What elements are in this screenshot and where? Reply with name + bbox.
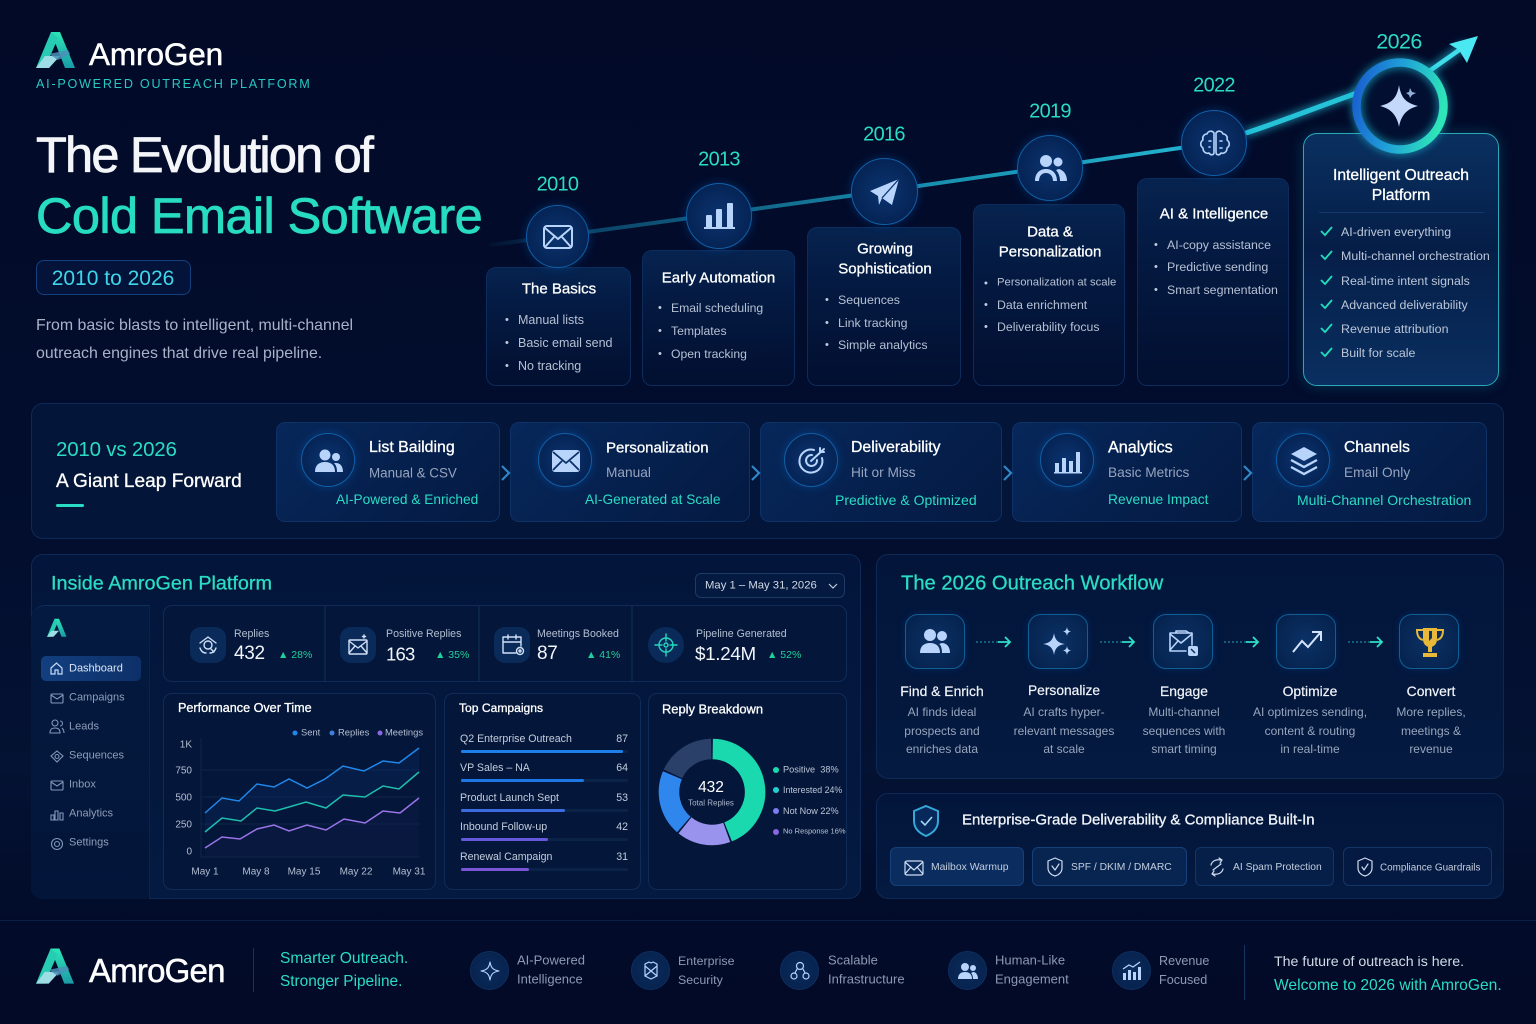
step: Personalize: AI crafts hyper- — [1023, 705, 1105, 719]
intro text: From basic blasts to intelligent, multi-channel — [36, 317, 353, 334]
card: Early Automation: Early Automation — [662, 269, 775, 286]
step: Convert: meetings & — [1401, 724, 1461, 738]
card: The Basics: No tracking — [518, 359, 581, 373]
timeline growth line with arrow — [494, 36, 1478, 246]
KPI bar: ▲ 35% — [435, 649, 469, 661]
card: Intelligent Outreach Platform: Built for scale — [1341, 346, 1415, 360]
node: 2022 brain — [1181, 110, 1247, 176]
step: Convert: Convert — [1407, 683, 1455, 699]
card: Growing Sophistication: Growing — [857, 240, 913, 257]
panel: The 2026 Outreach Workflow — [876, 554, 1504, 779]
campaign: Renewal Campaign — [460, 851, 628, 871]
chip: Mailbox Warmup: Mailbox Warmup — [931, 862, 1009, 873]
chart axis labels: 1K — [180, 739, 192, 750]
KPI bar: $1.24M — [695, 643, 756, 664]
title: Cold Email Software — [36, 187, 482, 244]
comparison card: deliverability — [760, 422, 1002, 522]
area: meetings — [205, 798, 419, 857]
node: 2010 envelope — [526, 205, 589, 268]
year 2019: 2019 — [1029, 100, 1071, 122]
chart axis labels: 750 — [175, 765, 192, 776]
node: 2013 bars — [686, 183, 752, 249]
step: Optimize — [1253, 612, 1367, 756]
comparison card: channels — [1252, 422, 1487, 522]
campaign: Q2 Enterprise Outreach — [460, 733, 628, 753]
donut legend: Not Now 22% — [783, 806, 839, 816]
KPI: replies — [190, 627, 226, 663]
comparison card: channels: Channels — [1344, 439, 1410, 456]
footer feature: Scalable Infrastructure — [780, 951, 905, 990]
footer divider — [0, 920, 1536, 921]
campaign: Q2 Enterprise Outreach: Q2 Enterprise Outreach — [460, 733, 572, 745]
campaign: Inbound Follow-up: 42 — [616, 821, 628, 833]
date range selector — [695, 573, 845, 598]
card: Data & Personalization: Deliverability focus — [997, 320, 1100, 334]
comparison card: analytics — [1012, 422, 1242, 522]
legend dots — [292, 730, 382, 736]
footer closing message — [1244, 945, 1506, 1000]
campaign: Product Launch Sept — [460, 792, 628, 812]
node: 2019 people — [1017, 135, 1083, 201]
footer feature: Revenue Focused: Revenue — [1159, 954, 1209, 968]
footer feature: Scalable Infrastructure: Scalable — [828, 953, 878, 968]
card: The Basics — [486, 267, 631, 386]
footer feature: Human-Like Engagement: Engagement — [995, 972, 1069, 987]
footer logo — [36, 948, 225, 989]
card: Intelligent Outreach Platform: AI-driven everything — [1341, 225, 1451, 239]
step: Find & Enrich: enriches data — [906, 742, 978, 756]
chart card: Performance Over Time — [163, 693, 436, 890]
step: Personalize: at scale — [1043, 742, 1085, 756]
campaign: Inbound Follow-up: Inbound Follow-up — [460, 821, 547, 833]
KPI: pipeline generated — [648, 627, 684, 663]
campaign: Product Launch Sept: Product Launch Sept — [460, 792, 559, 804]
comparison card: analytics: Revenue Impact — [1108, 492, 1208, 507]
sidebar — [31, 605, 150, 899]
step: Convert: revenue — [1409, 742, 1453, 756]
donut legend: No Response 16% — [783, 827, 846, 836]
comparison card: list building: Manual & CSV — [369, 465, 457, 480]
chart legend labels: Sent — [301, 727, 320, 738]
comparison card: channels: Email Only — [1344, 465, 1410, 480]
chart axis labels: May 22 — [340, 866, 372, 877]
step: Optimize: AI optimizes sending, — [1253, 705, 1367, 719]
nav icons — [49, 694, 64, 850]
comparison card: analytics: Analytics — [1108, 439, 1173, 457]
donut legend: Positive 38% — [783, 765, 839, 775]
footer feature: Scalable Infrastructure: Infrastructure — [828, 972, 905, 987]
footer feature: AI-Powered Intelligence: AI-Powered — [517, 953, 585, 968]
comparison card: personalization: Personalization — [606, 439, 709, 456]
card: Data & Personalization: Personalization at scale — [997, 277, 1116, 289]
card: Intelligent Outreach Platform: Revenue attribution — [1341, 322, 1448, 336]
year 2016: 2016 — [863, 124, 905, 146]
comparison card: personalization: Manual — [606, 465, 651, 480]
sidebar: Inbox — [69, 779, 96, 791]
footer feature: Revenue Focused — [1112, 951, 1209, 990]
footer slogan — [253, 948, 423, 992]
card: Early Automation — [642, 250, 795, 386]
intro text: outreach engines that drive real pipeline. — [36, 345, 322, 362]
card: Early Automation: Open tracking — [671, 347, 747, 361]
card: AI & Intelligence: Predictive sending — [1167, 260, 1268, 274]
grid lines — [201, 738, 420, 857]
footer feature: Enterprise Security: Enterprise — [678, 954, 734, 968]
step: Engage: Engage — [1160, 683, 1208, 699]
donut chart — [658, 738, 766, 846]
sidebar: Leads — [69, 721, 99, 733]
comparison card: analytics: Basic Metrics — [1108, 465, 1189, 480]
workflow heading: The 2026 Outreach Workflow — [901, 572, 1163, 594]
KPI bar: 163 — [386, 643, 414, 664]
arrow — [976, 636, 1012, 648]
sidebar: Sequences — [69, 750, 124, 762]
footer slogan: Stronger Pipeline. — [280, 973, 402, 990]
icon: shield — [913, 804, 939, 837]
date pill — [36, 260, 191, 295]
KPI dividers — [324, 606, 632, 681]
logo: AmroGen header mark — [36, 32, 75, 68]
card: Intelligent Outreach Platform: Advanced deliverability — [1341, 298, 1468, 312]
title — [36, 126, 482, 244]
step: Convert — [1396, 612, 1466, 756]
step: Personalize — [1014, 612, 1114, 756]
step: Engage — [1143, 612, 1225, 756]
KPI bar: ▲ 28% — [278, 649, 312, 661]
donut center label — [688, 779, 734, 807]
node: 2016 paper plane — [851, 158, 918, 225]
comparison heading: A Giant Leap Forward — [56, 471, 242, 492]
series: sent — [205, 748, 419, 813]
card: AI & Intelligence: AI-copy assistance — [1167, 238, 1271, 252]
sidebar logo — [47, 618, 66, 637]
step: Engage: Multi-channel — [1148, 705, 1220, 719]
step: Find & Enrich: Find & Enrich — [900, 683, 984, 699]
footer closing message: The future of outreach is here. — [1274, 953, 1464, 969]
step: Personalize: Personalize — [1028, 683, 1100, 698]
card: Top Campaigns: Top Campaigns — [459, 701, 543, 715]
chart title: Performance Over Time — [178, 701, 312, 715]
card: Data & Personalization — [973, 204, 1125, 386]
footer feature: Revenue Focused: Focused — [1159, 973, 1207, 987]
comparison card: list building — [276, 422, 500, 522]
nav: dashboard active — [41, 656, 141, 681]
campaign: Renewal Campaign: Renewal Campaign — [460, 851, 552, 863]
card: Early Automation: Email scheduling — [671, 301, 763, 315]
tagline: AI-POWERED OUTREACH PLATFORM — [36, 77, 311, 91]
card: Growing Sophistication: Sequences — [838, 293, 900, 307]
chart axis labels: 500 — [175, 792, 192, 803]
footer feature: AI-Powered Intelligence — [470, 951, 585, 990]
campaign: VP Sales - NA — [460, 762, 628, 782]
card: Early Automation: Templates — [671, 324, 727, 338]
footer slogan: Smarter Outreach. — [280, 950, 408, 967]
chart axis labels: May 31 — [393, 866, 425, 877]
card: AI & Intelligence: Smart segmentation — [1167, 283, 1278, 297]
card: Intelligent Outreach Platform: Intelligent Outreach — [1333, 166, 1469, 183]
chart legend labels: Replies — [338, 727, 369, 738]
campaign: Q2 Enterprise Outreach: 87 — [616, 733, 628, 745]
area: sent — [205, 748, 419, 832]
chip: Compliance Guardrails — [1343, 847, 1492, 886]
card: Intelligent Outreach Platform — [1303, 133, 1499, 386]
campaign: VP Sales - NA: VP Sales – NA — [460, 762, 530, 774]
panel: 2010 vs 2026 comparison — [31, 403, 1504, 539]
KPI bar: 432 — [234, 643, 265, 664]
campaign: VP Sales - NA: 64 — [616, 762, 628, 774]
card: Data & Personalization: Data enrichment — [997, 298, 1087, 312]
card: Growing Sophistication: Sophistication — [838, 260, 932, 277]
chip: SPF / DKIM / DMARC — [1032, 847, 1187, 886]
card: The Basics: The Basics — [522, 280, 596, 297]
sidebar: Settings — [69, 837, 109, 849]
panel: Enterprise-Grade Deliverability — [876, 793, 1504, 899]
year 2010: 2010 — [537, 174, 578, 196]
comparison heading: 2010 vs 2026 — [56, 438, 177, 461]
KPI bar: Pipeline Generated — [696, 628, 787, 640]
chart axis labels: May 15 — [288, 866, 320, 877]
KPI: positive replies — [340, 627, 376, 663]
donut legend — [773, 765, 846, 836]
KPI bar — [163, 605, 847, 682]
donut center label: 432 — [698, 779, 724, 796]
intro text — [36, 317, 353, 362]
nav: dashboard active: Dashboard — [69, 663, 123, 675]
year 2013: 2013 — [698, 148, 740, 170]
card: Reply Breakdown — [648, 693, 847, 890]
chevron arrows between comparison cards — [501, 465, 1252, 481]
card: AI & Intelligence — [1137, 178, 1289, 386]
card: Intelligent Outreach Platform: Multi-channel orchestration — [1341, 249, 1490, 263]
chart legend labels — [301, 727, 423, 738]
donut center label: Total Replies — [688, 798, 734, 807]
step: Engage: smart timing — [1151, 742, 1217, 756]
nav labels: Campaigns — [69, 692, 125, 704]
arrow — [1100, 636, 1136, 648]
step: Find & Enrich: AI finds ideal — [908, 705, 976, 719]
chart axis labels: 250 — [175, 819, 192, 830]
KPI bar: ▲ 52% — [767, 649, 801, 661]
chip: Compliance Guardrails: Compliance Guardrails — [1380, 862, 1480, 873]
step: Personalize: relevant messages — [1014, 724, 1114, 738]
comparison card: list building: AI-Powered & Enriched — [336, 492, 478, 507]
year 2026: 2026 — [1376, 30, 1422, 54]
panel heading: Inside AmroGen Platform — [51, 573, 272, 595]
chart axis labels: May 1 — [191, 866, 219, 877]
arrow — [1224, 636, 1260, 648]
footer feature: Human-Like Engagement — [948, 951, 1069, 990]
step: Find & Enrich — [900, 612, 984, 756]
footer closing message: Welcome to 2026 with AmroGen. — [1274, 977, 1502, 994]
card: The Basics: Basic email send — [518, 336, 612, 350]
panel: Inside AmroGen Platform — [31, 554, 861, 899]
card: Data & Personalization: Personalization — [999, 243, 1101, 260]
sidebar: Analytics — [69, 808, 113, 820]
comparison card: list building: List Bailding — [369, 439, 455, 456]
card: Intelligent Outreach Platform: Platform — [1372, 186, 1430, 203]
step: Find & Enrich: prospects and — [904, 724, 980, 738]
step: Convert: More replies, — [1396, 705, 1466, 719]
step: Engage: sequences with — [1143, 724, 1225, 738]
arrow — [1348, 636, 1384, 648]
campaign: Product Launch Sept: 53 — [616, 792, 628, 804]
chart legend labels: Meetings — [385, 727, 423, 738]
footer feature: AI-Powered Intelligence: Intelligence — [517, 972, 583, 987]
step: Optimize: content & routing — [1265, 724, 1355, 738]
step: Optimize: in real-time — [1280, 742, 1340, 756]
footer feature: Enterprise Security: Security — [678, 973, 723, 987]
chart axis labels — [175, 739, 425, 877]
chip: AI Spam Protection: AI Spam Protection — [1233, 862, 1322, 873]
donut legend: Interested 24% — [783, 785, 842, 795]
card: Top Campaigns — [444, 693, 641, 890]
KPI bar: 87 — [537, 643, 558, 664]
campaign: Inbound Follow-up — [460, 821, 628, 841]
year 2022: 2022 — [1193, 74, 1235, 96]
comparison card: deliverability: Deliverability — [851, 439, 941, 456]
campaign: Renewal Campaign: 31 — [616, 851, 628, 863]
footer feature: Human-Like Engagement: Human-Like — [995, 953, 1065, 968]
comparison card: channels: Multi-Channel Orchestration — [1297, 492, 1471, 508]
comparison card: deliverability: Predictive & Optimized — [835, 492, 977, 508]
series: meetings — [205, 798, 419, 848]
step: Optimize: Optimize — [1283, 683, 1337, 699]
card: The Basics: Manual lists — [518, 313, 584, 327]
series: replies — [205, 772, 419, 832]
title: The Evolution of — [36, 126, 372, 183]
card: AI & Intelligence: AI & Intelligence — [1160, 205, 1268, 222]
card: Reply Breakdown: Reply Breakdown — [662, 701, 763, 716]
chart axis labels: May 8 — [242, 866, 270, 877]
KPI: meetings booked — [494, 627, 530, 663]
KPI bar: Replies — [234, 628, 269, 640]
comparison card: personalization — [510, 422, 750, 522]
card: Data & Personalization: Data & — [1027, 223, 1073, 240]
chip: AI Spam Protection — [1195, 847, 1334, 886]
enterprise heading: Enterprise-Grade Deliverability & Compliance Built-In — [962, 811, 1315, 828]
footer feature: Enterprise Security — [631, 951, 734, 990]
chart axis labels: 0 — [186, 846, 192, 857]
card: Growing Sophistication: Simple analytics — [838, 338, 928, 352]
footer logo: AmroGen — [89, 952, 225, 989]
date pill: 2010 to 2026 — [52, 267, 174, 290]
card: Intelligent Outreach Platform: Real-time intent signals — [1341, 274, 1470, 288]
brand name: AmroGen — [89, 36, 223, 72]
comparison card: deliverability: Hit or Miss — [851, 465, 916, 480]
comparison card: personalization: AI-Generated at Scale — [585, 492, 720, 507]
date range selector: May 1 – May 31, 2026 — [705, 580, 817, 592]
KPI bar: Meetings Booked — [537, 628, 619, 640]
comparison heading — [56, 438, 242, 507]
card: Growing Sophistication: Link tracking — [838, 316, 908, 330]
chip: SPF / DKIM / DMARC: SPF / DKIM / DMARC — [1071, 862, 1172, 873]
line chart — [200, 730, 420, 858]
node: 2026 glowing ring with sparkle — [1346, 52, 1454, 160]
KPI bar: ▲ 41% — [586, 649, 620, 661]
card: Growing Sophistication — [807, 227, 961, 386]
KPI bar: Positive Replies — [386, 628, 461, 640]
chip: Mailbox Warmup — [890, 847, 1024, 886]
